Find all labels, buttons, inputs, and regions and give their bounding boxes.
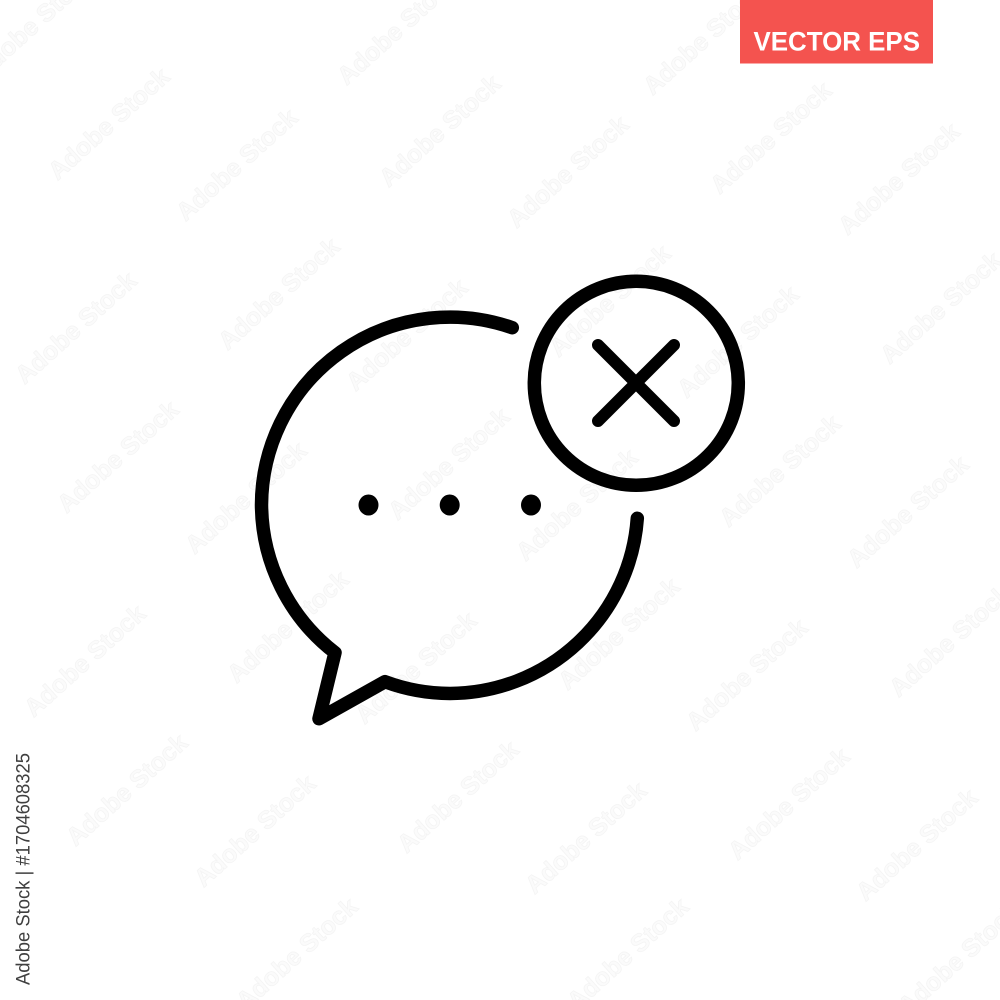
stock watermark pattern: Adobe Stock xyxy=(723,742,855,865)
stock watermark pattern: Adobe Stock xyxy=(341,273,473,396)
typing dots xyxy=(358,494,541,516)
stock watermark pattern: Adobe Stock xyxy=(350,606,482,729)
stock watermark pattern: Adobe Stock xyxy=(842,450,974,573)
stock watermark pattern: Adobe Stock xyxy=(19,599,151,722)
stock id caption: Adobe Stock | #1704608325 xyxy=(13,753,34,985)
stock watermark pattern: Adobe Stock xyxy=(374,69,506,192)
stock watermark pattern: Adobe Stock xyxy=(43,62,175,185)
stock watermark pattern: Adobe Stock xyxy=(681,613,813,736)
stock watermark pattern: Adobe Stock xyxy=(392,735,524,858)
cancel circle xyxy=(534,281,738,485)
stock watermark pattern: Adobe Stock xyxy=(10,266,142,389)
stock watermark pattern: Adobe Stock xyxy=(502,110,634,233)
stock watermark pattern: Adobe Stock xyxy=(851,783,983,906)
stock watermark pattern: Adobe Stock xyxy=(833,117,965,240)
icon: speech bubble with cancel badge xyxy=(262,281,738,719)
stock watermark pattern: Adobe Stock xyxy=(520,776,652,899)
stock watermark pattern: Adobe Stock xyxy=(180,436,312,559)
stock watermark pattern: Adobe Stock xyxy=(511,443,643,566)
stock watermark pattern: Adobe Stock xyxy=(213,232,345,355)
stock watermark pattern: Adobe Stock xyxy=(222,565,354,688)
stock watermark pattern: Adobe Stock xyxy=(52,395,184,518)
stock watermark pattern: Adobe Stock xyxy=(171,103,303,226)
stock watermark pattern: Adobe Stock xyxy=(61,728,193,851)
stock watermark pattern: Adobe Stock xyxy=(705,76,837,199)
stock watermark pattern: Adobe Stock xyxy=(714,409,846,532)
badge: VECTOR EPS xyxy=(740,0,933,64)
badge: VECTOR EPS: VECTOR EPS xyxy=(754,26,920,56)
speech bubble outline with tail xyxy=(262,317,637,719)
cross mark xyxy=(598,345,674,421)
stock watermark pattern: Adobe Stock xyxy=(544,239,676,362)
stock watermark pattern: Adobe Stock xyxy=(672,280,804,403)
stock watermark pattern: Adobe Stock xyxy=(189,769,321,892)
stock watermark pattern: Adobe Stock xyxy=(553,572,685,695)
stock watermark pattern: Adobe Stock xyxy=(383,402,515,525)
